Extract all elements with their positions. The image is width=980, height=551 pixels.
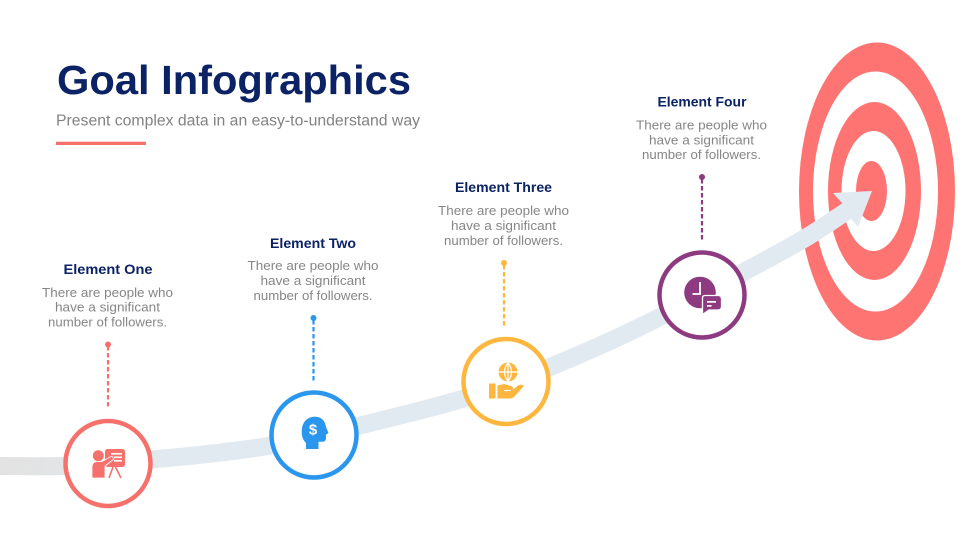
element four <box>636 94 767 338</box>
connector: element four <box>699 174 705 240</box>
text: element four <box>636 117 767 162</box>
text: element three: number of followers. <box>444 233 563 248</box>
icon: head with dollar <box>302 417 328 449</box>
heading: element two: Element Two <box>270 235 356 251</box>
heading: element three: Element Three <box>455 179 552 195</box>
text: element one <box>42 285 173 330</box>
heading: element one: Element One <box>64 261 153 277</box>
text: element one: number of followers. <box>48 314 167 330</box>
text: element three: There are people who <box>438 203 569 218</box>
text: element one: There are people who <box>42 285 173 300</box>
icon: presenter at board <box>92 449 125 478</box>
icon: clock with speech bubble <box>684 277 722 314</box>
connector: element three <box>501 260 507 326</box>
heading: element four: Element Four <box>658 94 747 110</box>
title: Goal Infographics <box>57 57 411 103</box>
badge: element one <box>66 421 150 506</box>
badge: element two <box>272 392 356 478</box>
text: element two: There are people who <box>248 258 378 273</box>
text: element four: There are people who <box>636 117 767 132</box>
text: element two: have a significant <box>260 273 366 288</box>
connector: element two <box>310 315 316 381</box>
subtitle: Present complex data in an easy-to-understand way <box>56 112 420 130</box>
text: element four: number of followers. <box>642 147 761 162</box>
text: element one: have a significant <box>55 300 160 314</box>
title underline <box>56 142 146 145</box>
element two <box>248 235 378 478</box>
connector: element one <box>105 342 111 408</box>
target <box>799 42 955 340</box>
badge: element three <box>464 339 548 424</box>
text: element two <box>248 258 378 303</box>
badge: element four <box>660 252 744 338</box>
text: element four: have a significant <box>649 132 754 147</box>
text: element three: have a significant <box>451 218 556 233</box>
icon: hand holding globe <box>489 362 524 398</box>
element one <box>42 261 173 506</box>
text: element three <box>438 203 569 248</box>
element three <box>438 179 569 424</box>
growth arrow <box>0 191 872 466</box>
text: element two: number of followers. <box>254 288 372 303</box>
icon: head with dollar: $ <box>309 422 318 438</box>
